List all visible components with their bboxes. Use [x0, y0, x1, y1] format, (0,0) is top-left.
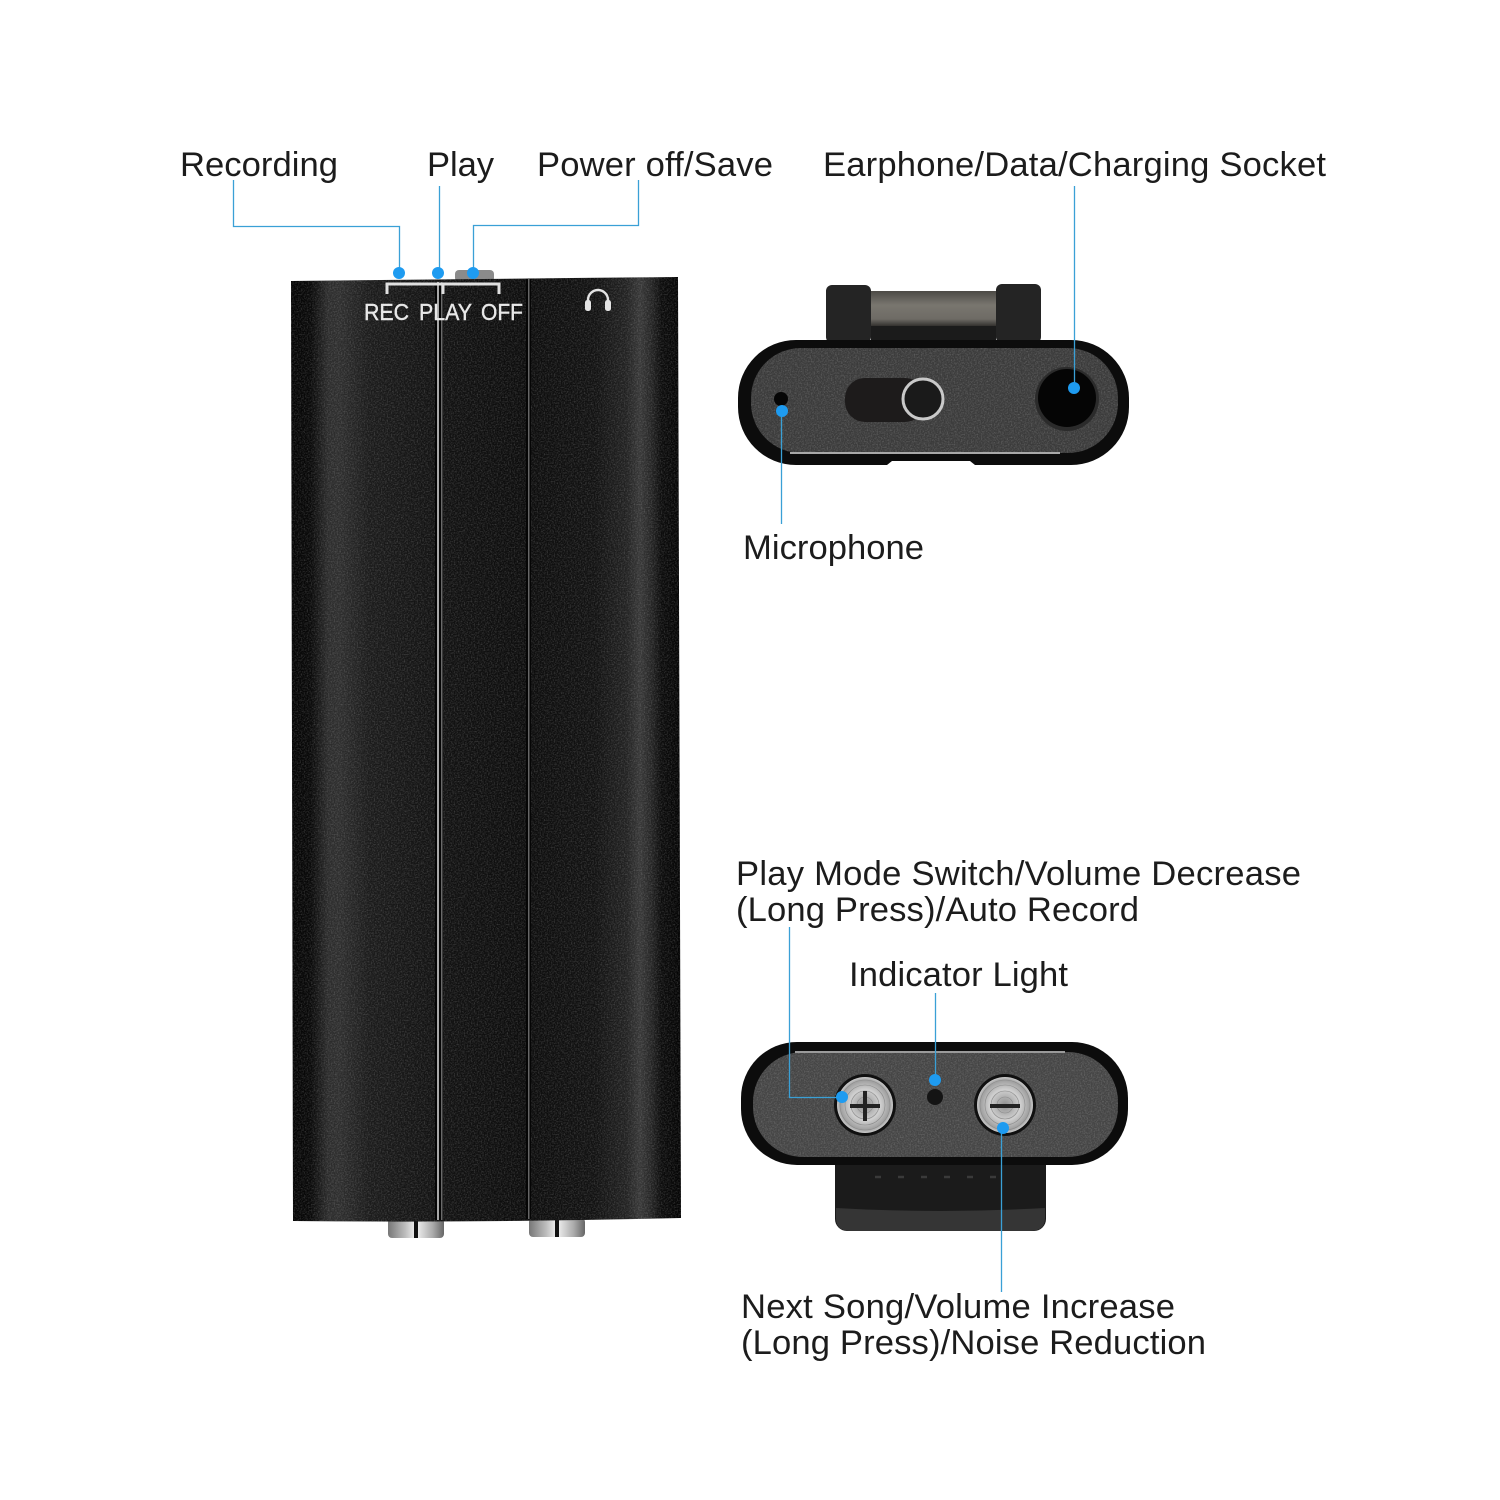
end casing — [738, 340, 1129, 465]
microphone hole — [774, 392, 788, 406]
device body — [291, 277, 681, 1222]
earphone socket — [1035, 367, 1099, 431]
button labels — [364, 299, 523, 325]
callout: Power off/Save: Power off/Save — [537, 146, 773, 184]
callout: Microphone — [743, 405, 924, 567]
callout: Next Song: Next Song/Volume Increase — [741, 1288, 1175, 1326]
left groove line — [435, 282, 443, 1220]
button bracket — [387, 284, 499, 294]
bottom end view — [741, 1042, 1128, 1231]
belt clip — [826, 284, 1041, 343]
callout: Indicator Light — [849, 956, 1068, 1086]
callout: Play — [427, 146, 495, 279]
left bottom jack — [388, 1218, 444, 1238]
clip — [835, 1150, 1046, 1231]
end plate — [753, 1052, 1118, 1157]
slide switch — [845, 378, 943, 422]
minus button — [974, 1074, 1036, 1136]
power-off button nub — [455, 270, 494, 282]
plate highlight — [795, 1051, 1065, 1053]
plus button — [834, 1074, 896, 1136]
callout: Microphone: Microphone — [743, 529, 924, 567]
callout: Recording — [180, 146, 405, 279]
callout: Recording: Recording — [180, 146, 338, 184]
callout: Earphone/Data/Charging Socket — [823, 146, 1326, 394]
recorder front view — [291, 270, 681, 1238]
callout: Play Mode Switch — [736, 855, 1301, 1103]
plate highlight — [790, 452, 1060, 454]
icon: headphones — [585, 290, 611, 311]
callout: Play: Play — [427, 146, 495, 184]
button labels: PLAY — [419, 299, 472, 325]
callout: Next Song — [741, 1122, 1206, 1362]
button labels: OFF — [481, 299, 523, 325]
button labels: REC — [364, 299, 409, 325]
callout: Indicator Light: Indicator Light — [849, 956, 1068, 994]
top end view — [738, 284, 1129, 465]
callout: Power off/Save — [467, 146, 773, 279]
right bottom jack — [529, 1218, 585, 1237]
callout: Play Mode Switch: (Long Press)/Auto Record — [736, 891, 1139, 929]
end plate — [751, 348, 1118, 453]
indicator light hole — [927, 1089, 943, 1105]
callout: Play Mode Switch: Play Mode Switch/Volume Decrease — [736, 855, 1301, 893]
callout: Earphone/Data/Charging Socket: Earphone/Data/Charging Socket — [823, 146, 1326, 184]
right groove line — [526, 279, 531, 1219]
end casing — [741, 1042, 1128, 1165]
callout: Next Song: (Long Press)/Noise Reduction — [741, 1324, 1206, 1362]
